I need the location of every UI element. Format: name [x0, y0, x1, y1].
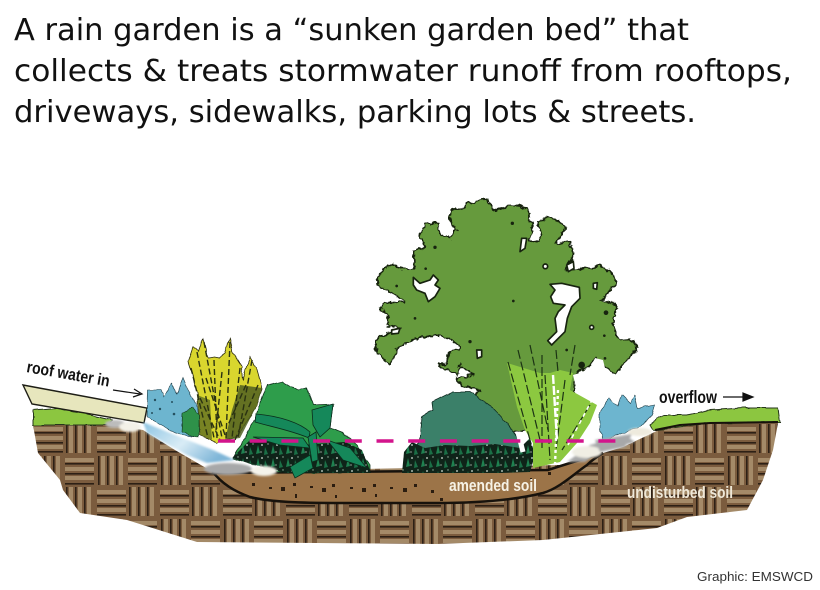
tree canopy gaps — [392, 238, 597, 358]
label: undisturbed soil: undisturbed soil — [627, 484, 733, 502]
label: roof water in: roof water in — [25, 358, 111, 391]
soil cross-section — [33, 423, 778, 544]
rocks — [105, 420, 652, 476]
label: overflow: overflow — [659, 387, 717, 407]
shrub specks — [151, 399, 175, 415]
left blue shrub — [147, 378, 200, 437]
white blade marks — [518, 375, 600, 465]
title: driveways, sidewalks, parking lots & streets. — [14, 95, 696, 130]
dark foliage base right — [402, 438, 535, 473]
title: A rain garden is a “sunken garden bed” that — [14, 13, 689, 48]
teal shrub — [410, 392, 523, 455]
title — [14, 13, 792, 130]
ground line right — [655, 422, 778, 430]
dark foliage base left — [232, 404, 371, 478]
leaves — [253, 404, 367, 478]
yellow ornamental grass — [188, 338, 262, 443]
right blue shrub — [600, 395, 655, 441]
left grass — [33, 408, 113, 425]
title: collects & treats stormwater runoff from rooftops, — [14, 54, 792, 89]
dark green shrub — [233, 381, 370, 472]
grass blade marks — [191, 342, 258, 440]
arrow — [113, 389, 142, 397]
arrow — [723, 393, 753, 401]
roof downspout — [23, 385, 147, 423]
credit: Graphic: EMSWCD — [697, 569, 813, 584]
white gap behind grass — [573, 358, 623, 410]
tree canopy — [375, 200, 637, 440]
right grass — [650, 408, 780, 430]
water stream — [143, 422, 235, 463]
tree canopy specks — [395, 222, 608, 368]
grass blade marks — [508, 345, 590, 460]
small green shrub — [181, 408, 199, 438]
bright green ornamental grass — [507, 345, 600, 468]
amended soil bed — [213, 453, 603, 503]
olive shade — [225, 385, 262, 440]
label: amended soil: amended soil — [449, 477, 537, 495]
soil specks — [252, 472, 551, 501]
ponding level dashed line — [218, 439, 618, 443]
